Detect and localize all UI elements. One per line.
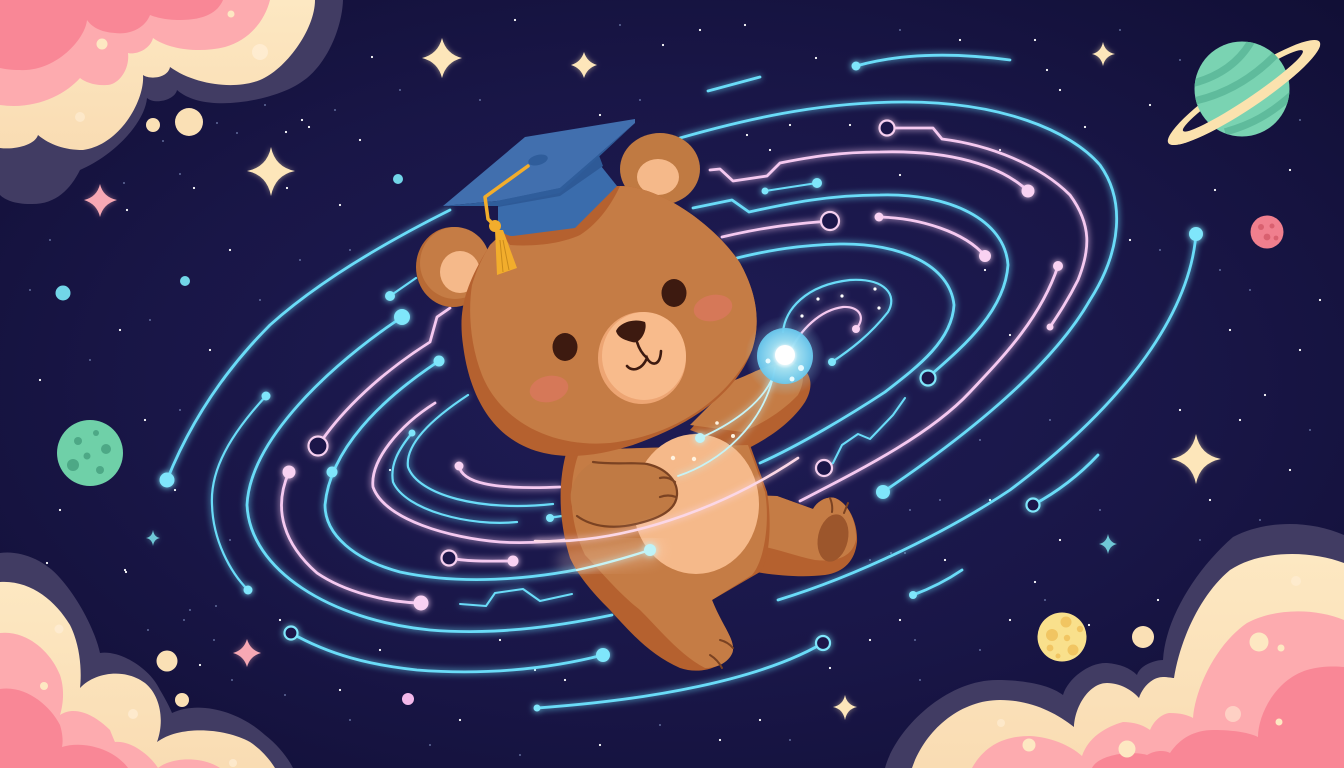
decorative small orbs [56, 108, 1154, 707]
planet: pink planet [1250, 216, 1284, 248]
pink orbit lines [282, 128, 1087, 603]
glowing orb in paw [745, 316, 825, 396]
bear cheeks [527, 372, 571, 406]
cloud: bottom right [885, 524, 1344, 768]
line end nodes [160, 62, 1203, 712]
bear body and lower leg [561, 445, 770, 671]
tassel [485, 166, 528, 275]
bear left arm [571, 462, 677, 527]
sparkle dots on belly [671, 421, 735, 461]
soft light band across the bear [570, 550, 650, 562]
cloud: top left [0, 0, 343, 204]
bear [416, 119, 857, 671]
planet: yellow moon [1038, 612, 1086, 662]
sparkle stars [84, 38, 1221, 720]
cloud: bottom left [0, 552, 293, 768]
bear head [461, 186, 757, 456]
galaxy spiral lines behind the bear [160, 55, 1203, 711]
blue orbit lines [167, 55, 1196, 708]
bear nose and mouth [616, 320, 646, 342]
bear ears [416, 133, 700, 307]
bear muzzle [598, 312, 686, 404]
planet: ringed green planet [1168, 40, 1320, 145]
graduation cap [443, 119, 635, 275]
planet: green cratered planet [57, 420, 123, 486]
bear raised arm [690, 362, 810, 450]
bear eyes [552, 333, 578, 361]
glowing lines crossing the bear [535, 368, 798, 570]
bear belly [633, 434, 759, 574]
bear right leg [740, 495, 857, 576]
